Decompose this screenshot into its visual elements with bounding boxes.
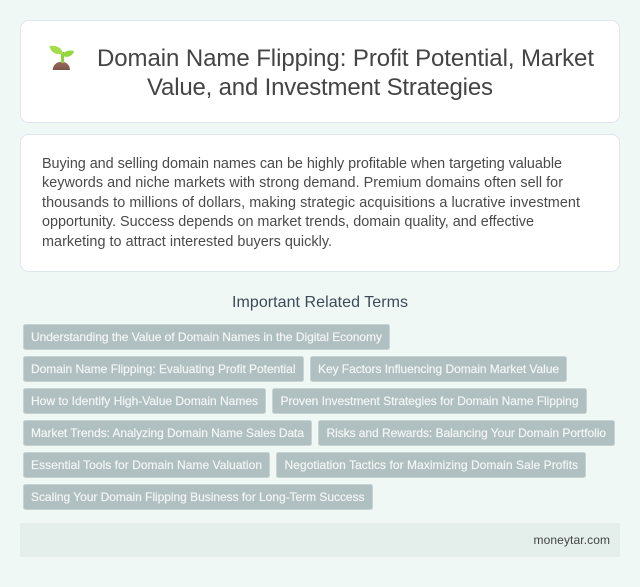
tag 10: Scaling Your Domain Flipping Business for Long-Term Success [31, 490, 364, 504]
tag 7: Risks and Rewards: Balancing Your Domain Portfolio [326, 426, 606, 440]
tag 6: Market Trends: Analyzing Domain Name Sales Data [31, 426, 304, 440]
footer source: moneytar.com [534, 533, 610, 547]
title: Value, and Investment Strategies [147, 74, 493, 101]
title [97, 45, 594, 101]
tag 2: Domain Name Flipping: Evaluating Profit Potential [31, 362, 296, 376]
tag 9: Negotiation Tactics for Maximizing Domain Sale Profits [284, 458, 578, 472]
tag 1: Understanding the Value of Domain Names in the Digital Economy [31, 330, 382, 344]
tag 8: Essential Tools for Domain Name Valuation [31, 458, 262, 472]
tag 1 [24, 324, 390, 350]
panel: description card [20, 134, 620, 272]
title: Domain Name Flipping: Profit Potential, Market [97, 45, 594, 72]
heading: related terms: Important Related Terms [232, 294, 408, 311]
tag 8 [24, 452, 270, 478]
tag 7 [318, 420, 614, 446]
footer bar [20, 523, 620, 557]
tag 2 [24, 356, 304, 382]
tag 10 [24, 484, 372, 510]
tag 6 [24, 420, 312, 446]
text block: description [42, 156, 580, 250]
tag 9 [276, 452, 586, 478]
tag 3 [310, 356, 566, 382]
text block: description: opportunity. Success depends on market trends, domain quality, and effective [42, 214, 534, 230]
icon: seedling [50, 46, 74, 70]
text block: description: marketing to attract interested buyers quickly. [42, 234, 332, 250]
tag 4 [24, 388, 266, 414]
tag 4: How to Identify High-Value Domain Names [31, 394, 258, 408]
tag 5: Proven Investment Strategies for Domain Name Flipping [280, 394, 578, 408]
text block: description: thousands to millions of dollars, making strategic acquisitions a lucrative investment [42, 195, 580, 211]
panel: related term tags [24, 324, 614, 510]
panel: title card [20, 20, 620, 122]
text block: description: keywords and niche markets with strong demand. Premium domains often sell for [42, 175, 563, 191]
tag 5 [272, 388, 586, 414]
tag 3: Key Factors Influencing Domain Market Value [318, 362, 559, 376]
text block: description: Buying and selling domain names can be highly profitable when targeting valuable [42, 156, 562, 172]
